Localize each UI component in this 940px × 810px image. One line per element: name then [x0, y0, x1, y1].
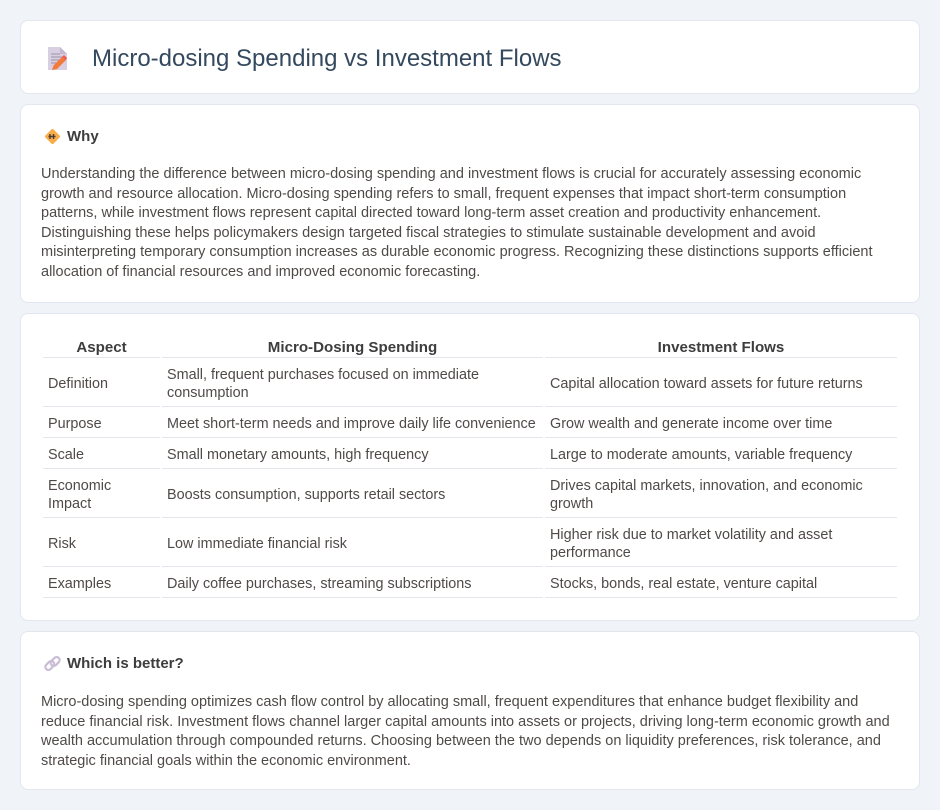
panel: which is better [20, 631, 920, 790]
title: Micro-dosing Spending vs Investment Flows [92, 45, 562, 72]
comparison table: Daily coffee purchases, streaming subscriptions [167, 576, 471, 592]
comparison table: Aspect [76, 339, 127, 356]
comparison table: Low immediate financial risk [167, 536, 347, 552]
panel: title header [20, 20, 920, 94]
text: which is better paragraph [41, 694, 890, 768]
comparison table: performance [550, 545, 631, 561]
comparison table: Stocks, bonds, real estate, venture capital [550, 576, 817, 592]
comparison table: Small, frequent purchases focused on immediate [167, 367, 479, 383]
comparison table: Definition [48, 376, 108, 392]
text: why paragraph [41, 166, 872, 280]
heading: why: Why [67, 128, 99, 145]
panel: comparison table [20, 313, 920, 621]
comparison table: Examples [48, 576, 111, 592]
comparison table: consumption [167, 385, 249, 401]
comparison table: Purpose [48, 416, 102, 432]
comparison table: Micro-Dosing Spending [268, 339, 437, 356]
comparison table [43, 339, 897, 598]
comparison table: Large to moderate amounts, variable frequency [550, 447, 852, 463]
comparison table: Capital allocation toward assets for future returns [550, 376, 863, 392]
text: which is better paragraph: reduce financial risk. Investment flows channel larger capital amounts into assets or projects, driving long-term economic growth and [41, 714, 890, 730]
comparison table: Small monetary amounts, high frequency [167, 447, 429, 463]
text: why paragraph: Understanding the difference between micro-dosing spending and investment flows is crucial for accurately assessing economic [41, 166, 861, 182]
text: which is better paragraph: Micro-dosing spending optimizes cash flow control by allocating small, frequent expenditures that enhance budget flexibility and [41, 694, 858, 710]
comparison table: Boosts consumption, supports retail sectors [167, 487, 445, 503]
comparison table: Risk [48, 536, 76, 552]
heading: which is better: Which is better? [67, 655, 184, 672]
comparison table: Drives capital markets, innovation, and economic [550, 478, 863, 494]
text: why paragraph: Distinguishing these helps policymakers design targeted fiscal strategies to stimulate sustainable development and avoid [41, 224, 816, 240]
text: why paragraph: growth and resource allocation. Micro-dosing spending refers to small, frequent expenses that impact short-term consumption [41, 186, 846, 202]
icon: chain link [44, 656, 61, 671]
comparison table: growth [550, 496, 593, 512]
text: why paragraph: patterns, while investment flows represent capital directed toward long-term asset creation and productivity enhancement. [41, 205, 821, 221]
comparison table: Grow wealth and generate income over time [550, 416, 832, 432]
icon: diamond sign [44, 128, 60, 144]
text: which is better paragraph: wealth accumulation through compounded returns. Choosing between the two depends on liquidity preferences, risk tolerance, and [41, 733, 881, 749]
comparison table: Investment Flows [658, 339, 784, 356]
comparison table: Meet short-term needs and improve daily life convenience [167, 416, 536, 432]
comparison table: Higher risk due to market volatility and asset [550, 527, 832, 543]
text: which is better paragraph: strategic financial goals within the economic environment. [41, 752, 411, 768]
panel: why [20, 104, 920, 303]
icon: memo with pencil [48, 47, 67, 70]
text: why paragraph: allocation of financial resources and improved economic forecasting. [41, 264, 480, 280]
comparison table: Economic [48, 478, 111, 494]
text: why paragraph: misinterpreting temporary consumption increases as durable economic progress. Recognizing these distinctions supports efficient [41, 244, 872, 260]
comparison table: Scale [48, 447, 84, 463]
comparison table: Impact [48, 496, 91, 512]
